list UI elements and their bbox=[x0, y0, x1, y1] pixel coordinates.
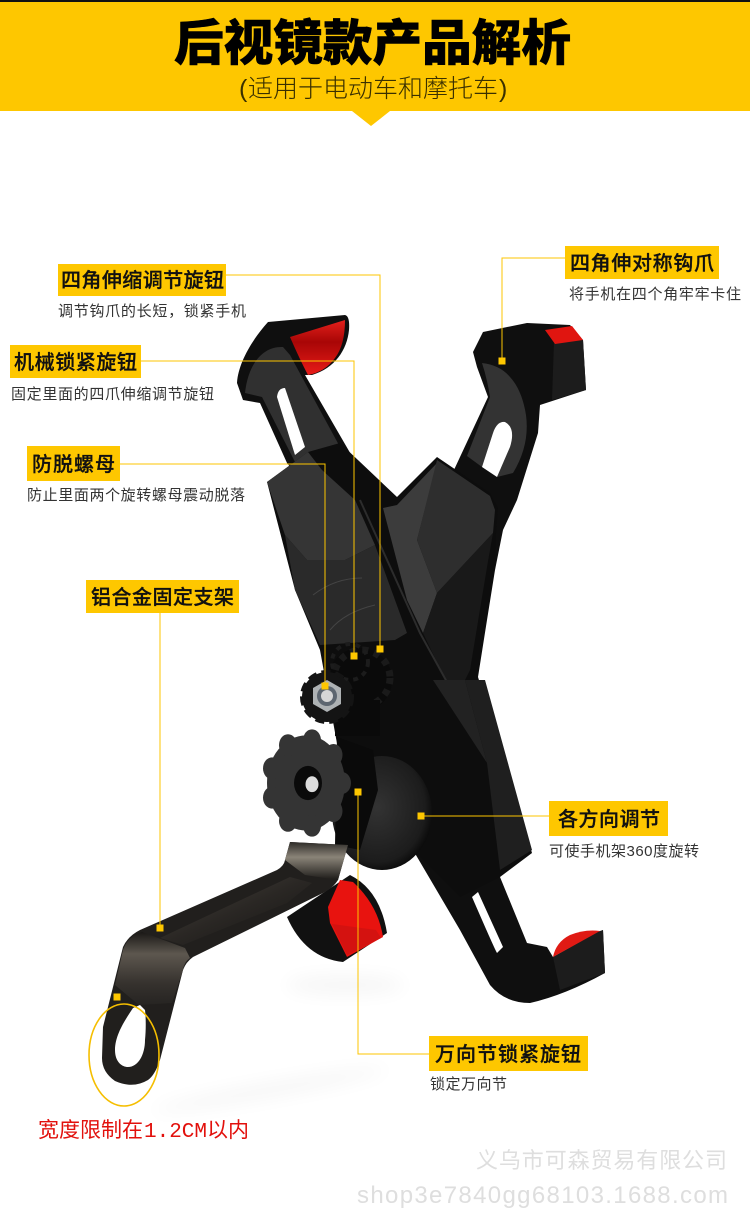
diagonal body highlights bbox=[360, 500, 532, 870]
marker: mounting hole highlight bbox=[89, 994, 159, 1106]
right wing panel bbox=[383, 460, 495, 700]
callout: 各方向调节: 各方向调节 bbox=[558, 808, 660, 831]
red pad top right bbox=[545, 326, 583, 344]
subtitle: ( bbox=[239, 75, 248, 103]
callout: 机械锁紧旋钮: 机械锁紧旋钮 bbox=[14, 351, 137, 374]
callout: 机械锁紧旋钮: 固定里面的四爪伸缩调节旋钮 bbox=[11, 386, 214, 403]
callout: 四角伸缩调节旋钮 bbox=[58, 264, 384, 652]
callout: 铝合金固定支架 bbox=[86, 580, 239, 932]
callout: 防脱螺母: 防脱螺母 bbox=[32, 453, 115, 476]
subtitle: ) bbox=[499, 75, 507, 103]
callout: 防脱螺母: 防止里面两个旋转螺母震动脱落 bbox=[27, 487, 245, 504]
subtitle: 适用于电动车和摩托车 bbox=[248, 75, 498, 103]
slot lower right bbox=[472, 892, 503, 953]
callout: 万向节锁紧旋钮 bbox=[354, 788, 588, 1093]
callout: 四角伸对称钩爪 bbox=[498, 246, 741, 364]
callout: 四角伸对称钩爪: 将手机在四个角牢牢卡住 bbox=[569, 286, 741, 303]
callout: 各方向调节 bbox=[418, 801, 699, 860]
lower left claw bbox=[287, 875, 387, 962]
callout: 四角伸缩调节旋钮: 调节钩爪的长短，锁紧手机 bbox=[58, 303, 246, 320]
red pad lower right bbox=[553, 930, 600, 957]
X body silhouette bbox=[267, 443, 532, 897]
callout: 万向节锁紧旋钮: 锁定万向节 bbox=[430, 1076, 507, 1093]
header banner bbox=[0, 0, 750, 126]
left wing panel bbox=[267, 452, 407, 645]
callout: 四角伸缩调节旋钮: 四角伸缩调节旋钮 bbox=[61, 269, 224, 292]
watermark: shop3e7840gg68103.1688.com bbox=[357, 1182, 728, 1209]
ball joint bbox=[332, 737, 432, 870]
product photo: phone holder with mirror mount bbox=[102, 315, 605, 1085]
locking knob with nut bbox=[302, 672, 352, 722]
red pad top left bbox=[290, 320, 345, 375]
soft floor shadows bbox=[150, 975, 405, 1119]
width limit note: 宽度限制在1.2CM以内 bbox=[38, 1119, 249, 1144]
title: 后视镜款产品解析 bbox=[174, 17, 571, 71]
aluminium bracket bbox=[102, 842, 348, 1085]
slot right bbox=[482, 422, 512, 477]
callout: 万向节锁紧旋钮: 万向节锁紧旋钮 bbox=[435, 1043, 581, 1066]
slot left bbox=[277, 388, 305, 455]
upper left claw bbox=[237, 315, 360, 480]
upper right claw bbox=[440, 323, 586, 570]
red pad lower left bbox=[328, 880, 383, 957]
callout: 四角伸对称钩爪: 四角伸对称钩爪 bbox=[570, 252, 714, 275]
callout: 机械锁紧旋钮 bbox=[10, 345, 358, 660]
adjusting gears bbox=[328, 644, 392, 736]
watermark bbox=[357, 1148, 728, 1209]
large adjusting knob bbox=[263, 729, 351, 837]
lower right claw bbox=[413, 850, 605, 1003]
callout: 防脱螺母 bbox=[27, 446, 328, 690]
callout: 各方向调节: 可使手机架360度旋转 bbox=[549, 843, 699, 860]
watermark: 义乌市可森贸易有限公司 bbox=[476, 1148, 727, 1173]
callout: 铝合金固定支架: 铝合金固定支架 bbox=[91, 586, 234, 609]
